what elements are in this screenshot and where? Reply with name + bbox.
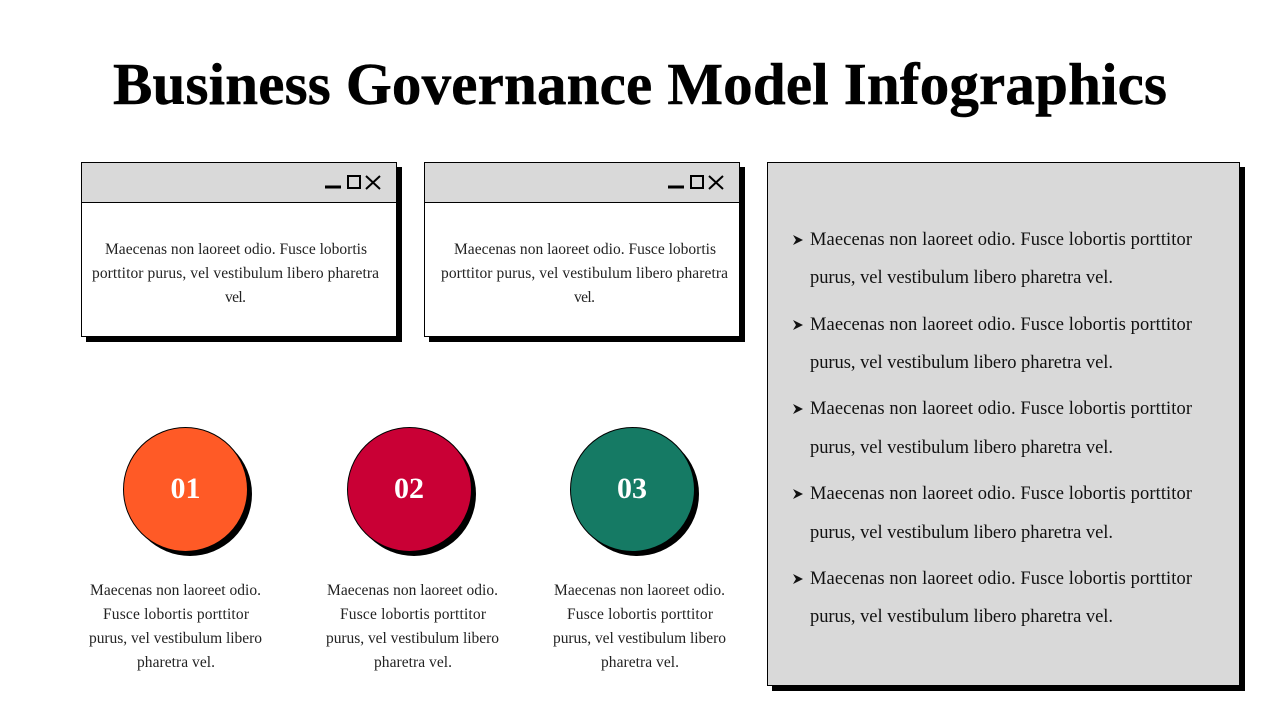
bullet item 3: purus, vel vestibulum libero pharetra vel.	[810, 438, 1113, 458]
text: window card 1 body: porttitor purus, vel vestibulum libero pharetra	[92, 265, 379, 282]
text: window card 2 body: vel.	[574, 289, 595, 306]
panel: bullet list	[768, 162, 1245, 691]
text: caption 02: purus, vel vestibulum libero	[326, 630, 499, 647]
bullet item 5: Maecenas non laoreet odio. Fusce lobortis porttitor	[810, 569, 1192, 589]
circle 03	[570, 428, 699, 556]
circle 01: 01	[170, 472, 200, 505]
bullet item 5: purus, vel vestibulum libero pharetra vel.	[810, 607, 1113, 627]
panel: window card 1	[82, 162, 402, 342]
bullet item 3	[793, 399, 1192, 458]
text: caption 03: Maecenas non laoreet odio.	[554, 582, 725, 599]
bullet item 1: purus, vel vestibulum libero pharetra vel.	[810, 268, 1113, 288]
text: caption 01: Maecenas non laoreet odio.	[90, 582, 261, 599]
text: caption 03	[553, 582, 726, 671]
text: window card 2 body: Maecenas non laoreet odio. Fusce lobortis	[454, 241, 716, 258]
title: Business Governance Model Infographics	[113, 51, 1167, 117]
icon: window controls	[668, 176, 723, 189]
text: caption 01: pharetra vel.	[137, 654, 215, 671]
circle 01	[124, 428, 252, 556]
text: window card 1 body	[92, 241, 379, 306]
bullet item 2: Maecenas non laoreet odio. Fusce lobortis porttitor	[810, 315, 1192, 335]
text: window card 1 body: Maecenas non laoreet odio. Fusce lobortis	[105, 241, 367, 258]
text: caption 02	[326, 582, 499, 671]
bullet item 3: Maecenas non laoreet odio. Fusce lobortis porttitor	[810, 399, 1192, 419]
text: caption 03: purus, vel vestibulum libero	[553, 630, 726, 647]
bullet item 1: Maecenas non laoreet odio. Fusce lobortis porttitor	[810, 230, 1192, 250]
icon: window controls	[325, 176, 380, 189]
bullet item 1	[793, 230, 1192, 288]
circle 02: 02	[394, 472, 424, 505]
text: caption 03: pharetra vel.	[601, 654, 679, 671]
text: caption 01	[89, 582, 262, 671]
text: caption 01: purus, vel vestibulum libero	[89, 630, 262, 647]
bullet item 4	[793, 484, 1192, 543]
panel: window card 2	[424, 162, 745, 342]
bullet item 5	[793, 569, 1192, 627]
circle 02	[348, 428, 476, 556]
text: caption 03: Fusce lobortis porttitor	[567, 606, 714, 623]
bullet item 2	[793, 315, 1192, 373]
circle 03: 03	[617, 472, 647, 505]
text: caption 02: pharetra vel.	[374, 654, 452, 671]
text: window card 2 body: porttitor purus, vel vestibulum libero pharetra	[441, 265, 728, 282]
bullet item 4: Maecenas non laoreet odio. Fusce lobortis porttitor	[810, 484, 1192, 504]
bullet item 4: purus, vel vestibulum libero pharetra vel.	[810, 523, 1113, 543]
bullet item 2: purus, vel vestibulum libero pharetra vel.	[810, 353, 1113, 373]
text: caption 02: Fusce lobortis porttitor	[340, 606, 487, 623]
text: window card 2 body	[441, 241, 728, 306]
text: caption 02: Maecenas non laoreet odio.	[327, 582, 498, 599]
text: caption 01: Fusce lobortis porttitor	[103, 606, 250, 623]
text: window card 1 body: vel.	[225, 289, 246, 306]
